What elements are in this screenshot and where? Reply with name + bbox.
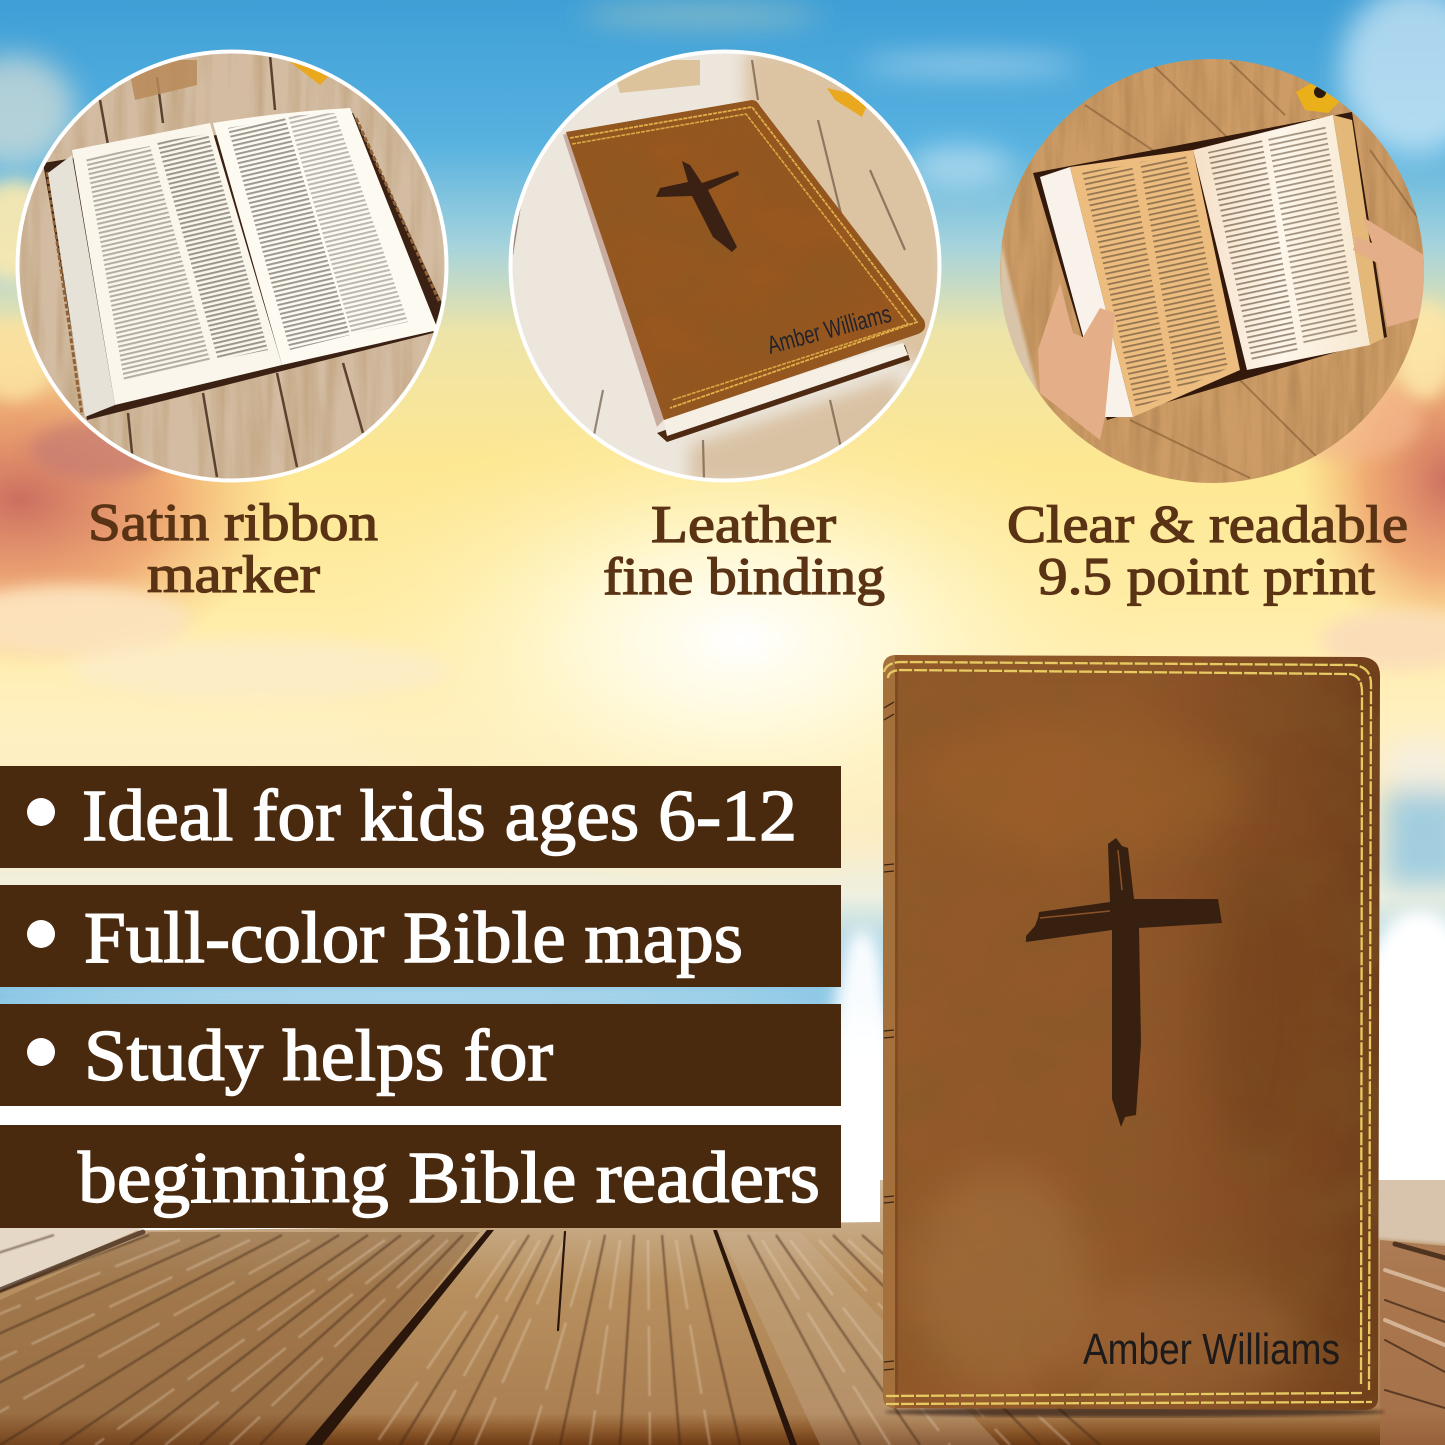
caption: Leather fine binding bbox=[603, 496, 885, 606]
photo circle: open Bible with satin ribbon marker bbox=[15, 50, 450, 485]
caption: Clear and readable print: Clear & readable bbox=[1007, 496, 1408, 554]
left page bbox=[72, 123, 282, 405]
photo circle: leather bound Bible bbox=[509, 50, 945, 485]
caption: Satin ribbon marker: marker bbox=[147, 546, 320, 604]
spine bbox=[563, 132, 668, 427]
feature bar: study helps bbox=[0, 1004, 841, 1106]
cover bbox=[566, 100, 925, 420]
bottom cover edge bbox=[657, 345, 910, 442]
right page bbox=[1193, 115, 1370, 370]
caption: Clear and readable print bbox=[1007, 496, 1408, 606]
feature bar: beginning readers: beginning Bible readers bbox=[78, 1137, 820, 1218]
spine edge bbox=[883, 655, 895, 1410]
product: leather Bible cover bbox=[883, 655, 1385, 1417]
feature bar: ages bbox=[0, 766, 841, 868]
right page bbox=[213, 108, 438, 365]
caption: Leather fine binding: fine binding bbox=[603, 548, 885, 606]
page block bbox=[48, 155, 115, 417]
caption: Clear and readable print: 9.5 point print bbox=[1038, 548, 1375, 606]
feature bar: study helps: Study helps for bbox=[84, 1015, 553, 1096]
caption: Leather fine binding: Leather bbox=[651, 496, 836, 554]
page edge tan bbox=[1333, 115, 1384, 345]
hands bbox=[1038, 283, 1115, 440]
feature bar: ages: Ideal for kids ages 6-12 bbox=[82, 775, 797, 856]
stitching bbox=[884, 662, 1372, 1404]
page edge bbox=[663, 343, 908, 436]
text columns bbox=[1082, 165, 1172, 408]
feature bar: maps bbox=[0, 885, 841, 987]
feature bar: beginning readers bbox=[0, 1125, 841, 1228]
feature bar: maps: Full-color Bible maps bbox=[84, 897, 743, 978]
caption: Satin ribbon marker: Satin ribbon bbox=[88, 494, 378, 552]
small cross bbox=[656, 161, 739, 252]
embossed cross bbox=[1026, 838, 1222, 1127]
engraved name: Amber Williams bbox=[1083, 1325, 1340, 1374]
text columns bbox=[86, 146, 210, 380]
left tan page bbox=[1070, 150, 1240, 417]
engraved name: Amber Williams bbox=[764, 300, 894, 360]
wooden table bbox=[0, 1175, 1445, 1445]
ribbon cover bbox=[43, 113, 442, 420]
photo circle: hands holding open Bible bbox=[998, 58, 1430, 488]
cover bbox=[1033, 112, 1387, 420]
caption: Satin ribbon marker bbox=[88, 494, 378, 604]
